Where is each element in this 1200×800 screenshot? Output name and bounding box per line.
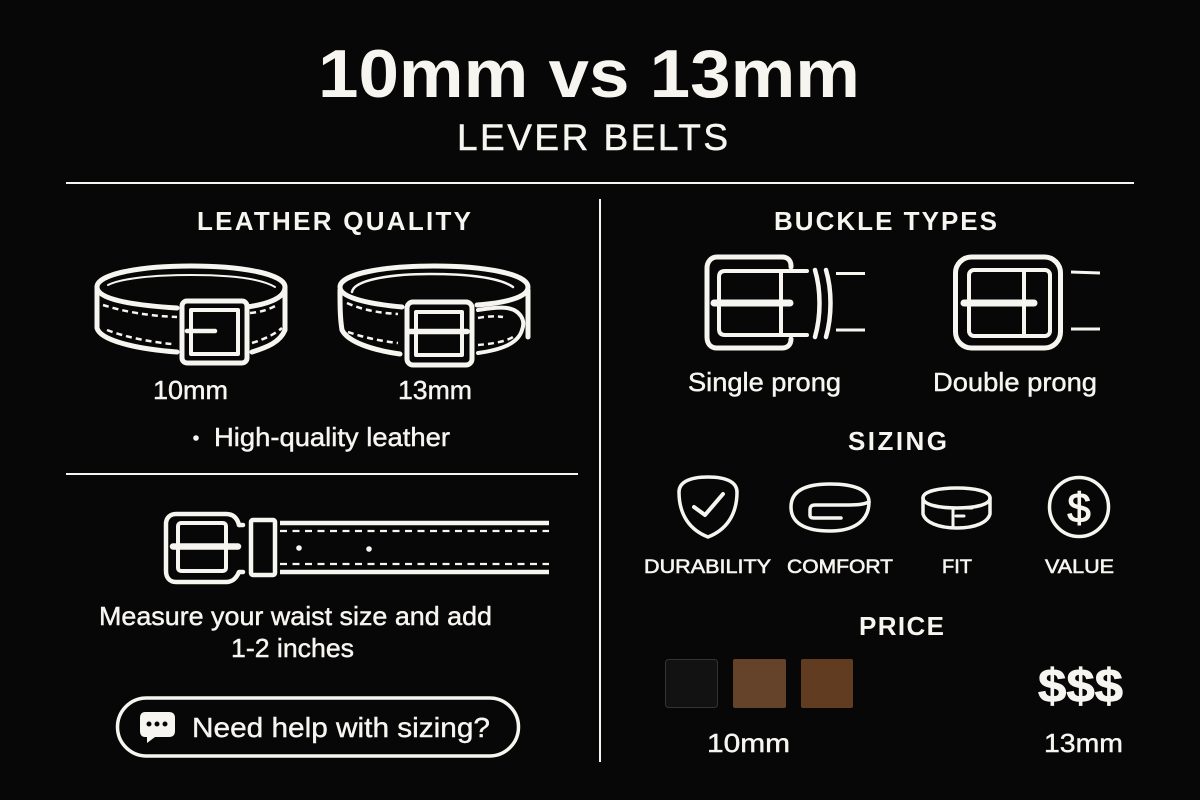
icon: single prong buckle: [707, 257, 865, 348]
price symbol: 13mm: $$$: [1038, 659, 1123, 712]
text: sizing instructions: Measure your waist size and add: [99, 601, 492, 631]
label: fit: FIT: [942, 556, 972, 578]
heading: sizing: SIZING: [848, 426, 947, 456]
swatch: dark brown leather: [801, 659, 853, 708]
callout: need help with sizing: [118, 698, 518, 756]
swatch: black leather: [666, 660, 718, 708]
text: sizing instructions: [99, 601, 492, 663]
label: single prong: Single prong: [688, 367, 841, 397]
heading: buckle types: BUCKLE TYPES: [774, 206, 997, 236]
label: 10mm: 10mm: [153, 375, 228, 405]
panel: leather quality: [97, 206, 549, 756]
panel: buckle types, sizing and price: [644, 206, 1123, 758]
text: sizing instructions: 1-2 inches: [231, 633, 354, 663]
icon: double prong buckle: [956, 257, 1100, 348]
swatch: brown leather: [733, 659, 786, 708]
label: 13mm price: 13mm: [1044, 728, 1123, 758]
icon: 13mm belt: [340, 266, 528, 365]
label: value: VALUE: [1045, 556, 1114, 578]
icon: chat bubble: [140, 712, 175, 743]
icon: fit belt: [923, 488, 990, 528]
icon: flat belt with buckle: [166, 514, 549, 582]
title: [318, 36, 860, 158]
callout: need help with sizing: Need help with sizing?: [192, 712, 490, 743]
label: durability: DURABILITY: [644, 556, 771, 578]
label: comfort: COMFORT: [787, 556, 893, 578]
label: double prong: Double prong: [933, 367, 1097, 397]
bullet: high-quality leather: High-quality leather: [214, 422, 450, 452]
icon: value dollar: $: [1067, 484, 1091, 531]
icon: durability shield: [679, 477, 737, 537]
icon: comfort belt: [791, 484, 869, 531]
label: 13mm: 13mm: [398, 375, 472, 405]
title: LEVER BELTS: [457, 117, 728, 158]
label: 10mm price: 10mm: [707, 728, 790, 758]
title: 10mm vs 13mm: [318, 36, 860, 112]
icon: value dollar: [1050, 478, 1108, 536]
heading: leather quality: LEATHER QUALITY: [197, 206, 471, 236]
icon: 10mm belt: [97, 266, 285, 363]
heading: price: PRICE: [859, 611, 944, 641]
